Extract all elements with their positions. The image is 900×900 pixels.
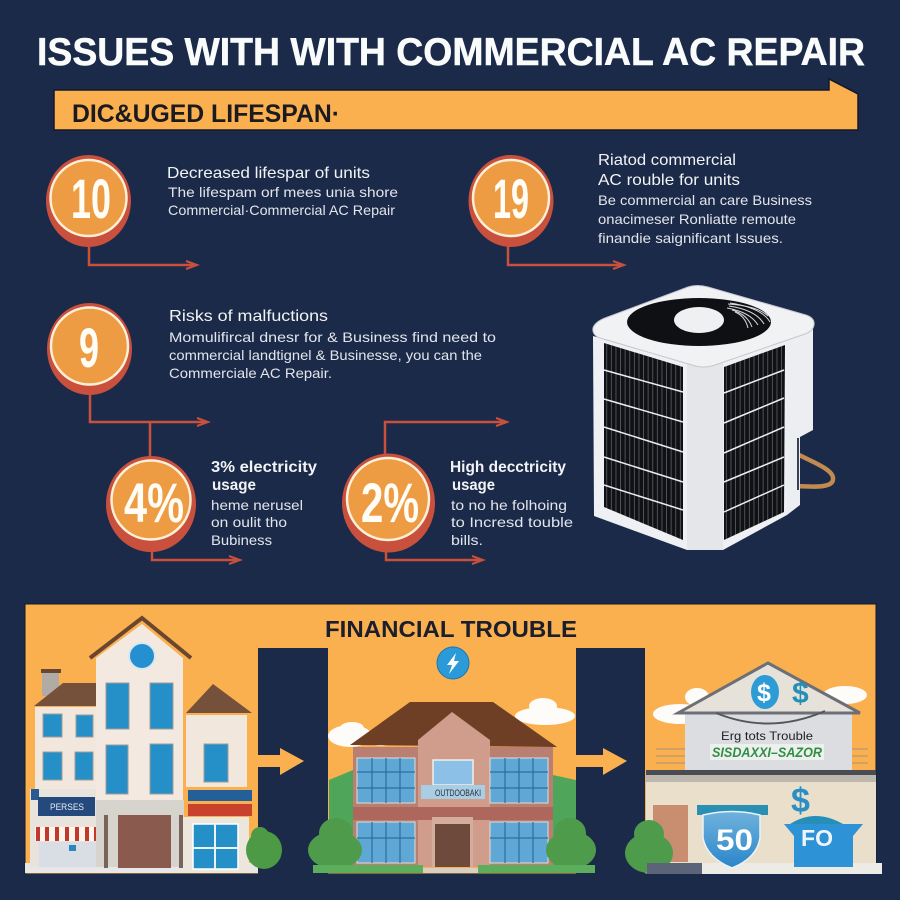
- icon: box with dollar sign: $: [791, 782, 810, 820]
- icon: dollar sign right: $: [792, 677, 809, 710]
- illustration: commercial storefront building: PERSES: [50, 802, 84, 812]
- icon: lightning bolt: [437, 647, 469, 679]
- item: 4% electricity usage: [106, 456, 317, 564]
- illustration: commercial storefront building: [25, 618, 282, 873]
- icon: shield with 50: 50: [716, 824, 753, 857]
- item: 19 commercial AC trouble: Be commercial an care Business: [598, 192, 812, 208]
- icon: dollar sign left: [751, 675, 779, 709]
- item: 4% electricity usage: Bubiness: [211, 532, 272, 548]
- item: 10 decreased lifespan: Commercial·Commercial AC Repair: [168, 202, 395, 218]
- item: 2% high electricity usage: to no he folhoing: [451, 497, 567, 513]
- icon: dollar sign left: $: [757, 679, 771, 707]
- item: 4% electricity usage: 4%: [124, 471, 184, 534]
- item: 19 commercial AC trouble: AC rouble for units: [598, 172, 740, 189]
- panel: financial trouble: [0, 604, 900, 900]
- item: 19 commercial AC trouble: finandie saignificant Issues.: [598, 230, 783, 246]
- item: 9 risks of malfunctions: 9: [79, 316, 99, 379]
- item: 4% electricity usage: heme nerusel: [211, 497, 303, 513]
- item: 19 commercial AC trouble: Riatod commercial: [598, 152, 736, 169]
- arrow: second to third building: [576, 748, 627, 775]
- item: 9 risks of malfunctions: [47, 303, 496, 458]
- item: 19 commercial AC trouble: 19: [493, 167, 529, 230]
- icon: shield with 50: [697, 805, 768, 868]
- illustration: brick office building: [308, 698, 596, 873]
- section banner: lifespan: [54, 79, 858, 130]
- item: 19 commercial AC trouble: onacimeser Ronliatte remoute: [598, 211, 796, 227]
- illustration: AC condenser unit: [593, 286, 833, 550]
- item: 9 risks of malfunctions: Momulifircal dnesr for & Business find need to: [169, 329, 496, 345]
- item: 10 decreased lifespan: [46, 155, 398, 269]
- arrow: first to second building: [258, 748, 304, 775]
- item: 2% high electricity usage: High decctricity: [450, 459, 566, 476]
- item: 9 risks of malfunctions: Risks of malfuctions: [169, 308, 328, 325]
- item: 10 decreased lifespan: 10: [71, 167, 111, 230]
- item: 2% high electricity usage: 2%: [361, 471, 419, 534]
- item: 10 decreased lifespan: Decreased lifespar of units: [167, 165, 370, 182]
- item: 2% high electricity usage: bills.: [451, 532, 483, 548]
- panel heading: FINANCIAL TROUBLE: [325, 616, 577, 642]
- title: ISSUES WITH WITH COMMERCIAL AC REPAIR: [37, 31, 865, 74]
- item: 2% high electricity usage: to Incresd touble: [451, 514, 573, 530]
- icon: box with dollar sign: [784, 782, 863, 867]
- item: 4% electricity usage: on oulit tho: [211, 514, 287, 530]
- sign text: [710, 729, 824, 760]
- icon: box with dollar sign: FO: [801, 825, 833, 851]
- sign text: SISDAXXI–SAZOR: [712, 744, 823, 760]
- item: 4% electricity usage: 3% electricity: [211, 459, 317, 476]
- item: 9 risks of malfunctions: Commerciale AC Repair.: [169, 365, 332, 381]
- illustration: bank building with costs: [625, 663, 882, 874]
- item: 4% electricity usage: usage: [212, 477, 256, 494]
- illustration: brick office building: OUTDOOBAKI: [435, 788, 481, 798]
- item: 10 decreased lifespan: The lifespam orf mees unia shore: [168, 184, 398, 200]
- item: 19 commercial AC trouble: [468, 152, 812, 269]
- item: 2% high electricity usage: [342, 418, 573, 564]
- item: 2% high electricity usage: usage: [452, 477, 495, 494]
- section banner: lifespan: DIC&UGED LIFESPAN·: [72, 100, 340, 128]
- sign text: Erg tots Trouble: [721, 729, 813, 743]
- item: 9 risks of malfunctions: commercial landtignel & Businesse, you can the: [169, 347, 482, 363]
